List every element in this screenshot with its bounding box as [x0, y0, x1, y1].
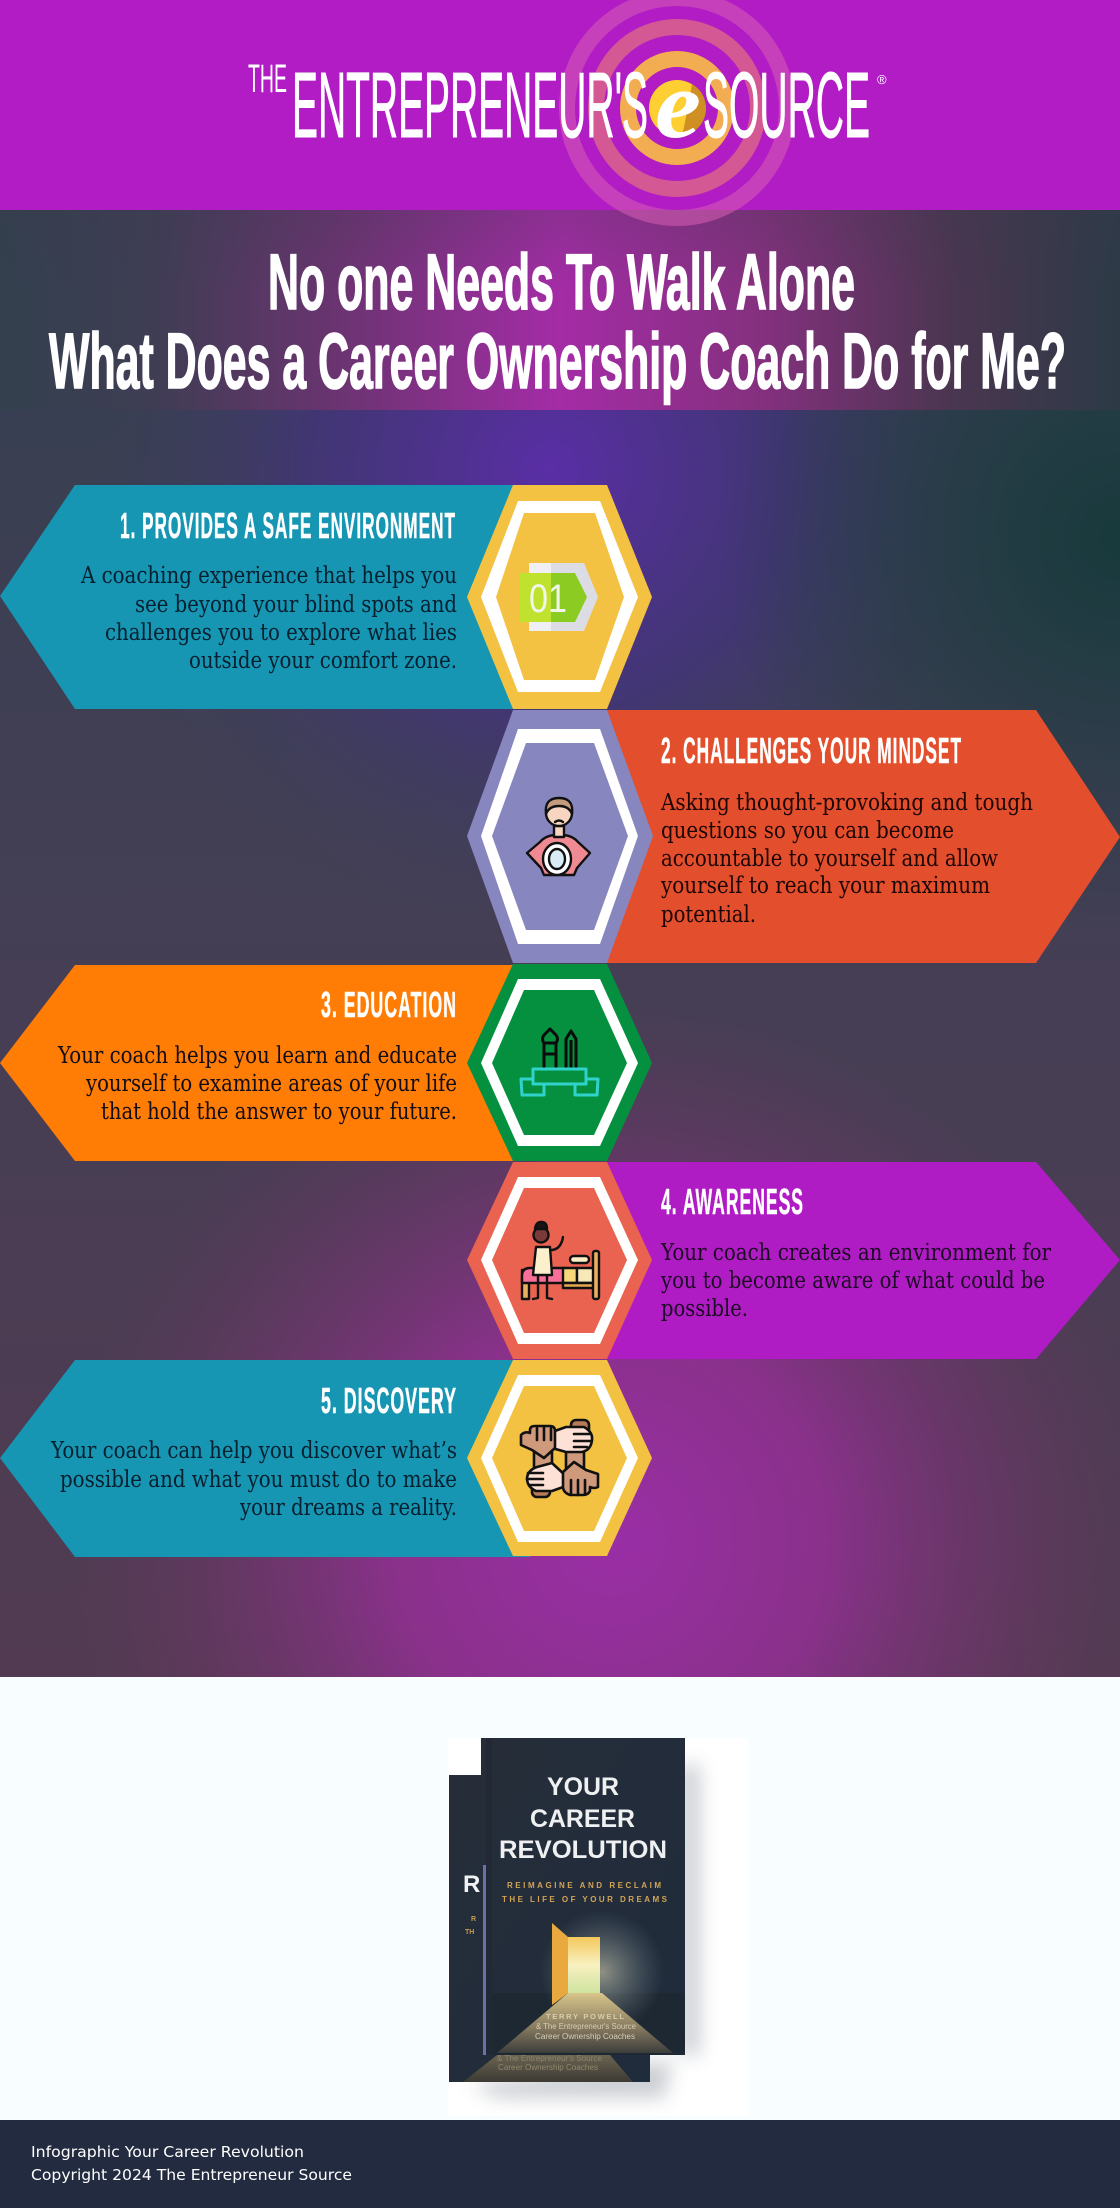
footer text: [31, 2143, 352, 2184]
body text 2: Asking thought-provoking and tough: [660, 790, 1033, 816]
body text 3: [57, 1043, 457, 1125]
body text 5: Your coach can help you discover what’s: [50, 1438, 457, 1464]
front book: YOUR: [547, 1773, 619, 1801]
front book: Career Ownership Coaches: [535, 2032, 635, 2041]
icon: 01 badge: [520, 563, 598, 631]
icon: person holding plate: [527, 798, 590, 875]
icon: brushes and banner: [521, 1029, 598, 1095]
hexagon 4: [467, 1162, 652, 1359]
front book: REVOLUTION: [499, 1836, 667, 1864]
back book: R: [471, 1916, 476, 1923]
body text 2: questions so you can become: [661, 818, 954, 844]
book image: [449, 1738, 700, 2098]
hexagon 5: [467, 1360, 652, 1556]
icon: 01 badge: 01: [529, 577, 567, 621]
panel: 4. awareness: [467, 1162, 1120, 1359]
back book: R: [463, 1871, 480, 1898]
front book: & The Entrepreneur's Source: [536, 2022, 637, 2031]
body text 1: see beyond your blind spots and: [135, 592, 457, 618]
body text 2: potential.: [661, 902, 756, 928]
logo wordmark: ®: [877, 72, 887, 87]
footer text: Copyright 2024 The Entrepreneur Source: [31, 2166, 352, 2184]
body text 2: yourself to reach your maximum: [660, 873, 990, 899]
panel: 3. education: 3. EDUCATION: [321, 984, 457, 1025]
text: SOURCE: [703, 53, 870, 157]
body text 4: [660, 1240, 1051, 1322]
body text 5: possible and what you must do to make: [60, 1467, 457, 1493]
footer text: Infographic Your Career Revolution: [31, 2143, 304, 2161]
logo wordmark: THE: [248, 57, 287, 101]
body text 3: that hold the answer to your future.: [101, 1099, 457, 1125]
body text 4: possible.: [661, 1296, 748, 1322]
body text 5: [50, 1438, 457, 1521]
front book: TERRY POWELL: [546, 2012, 624, 2021]
hexagon 2: [467, 710, 653, 963]
front book: CAREER: [530, 1805, 635, 1833]
header band: [0, 0, 1120, 210]
body text 3: Your coach helps you learn and educate: [57, 1043, 457, 1069]
body text 4: Your coach creates an environment for: [660, 1240, 1051, 1266]
panel: 1. provides a safe environment: 1. PROVIDES A SAFE ENVIRONMENT: [120, 505, 456, 546]
front book: REIMAGINE AND RECLAIM: [507, 1881, 661, 1890]
icon: person making bed: [522, 1222, 599, 1299]
footer: [0, 2120, 1120, 2208]
body text 1: outside your comfort zone.: [189, 648, 457, 674]
panel: 2. challenges your mindset: [467, 710, 1120, 963]
body text 2: [660, 790, 1033, 928]
front book: [481, 1738, 685, 2055]
logo wordmark: e: [655, 51, 701, 158]
back book: [449, 1775, 650, 2082]
panel: 4. awareness: 4. AWARENESS: [661, 1181, 804, 1222]
back book: Career Ownership Coaches: [498, 2063, 598, 2072]
logo: The Entrepreneur's Source: [248, 0, 887, 218]
white book section: [0, 1677, 1120, 2120]
back book: TH: [465, 1929, 474, 1936]
logo wordmark: ENTREPRENEUR'S: [292, 53, 648, 157]
panel: 5. discovery: [0, 1360, 652, 1557]
hexagon 3: [467, 964, 652, 1161]
background: gradient panel: [0, 210, 1120, 1677]
panel: 1. provides a safe environment: [0, 485, 652, 709]
logo target circles: [567, 0, 787, 218]
body text 3: yourself to examine areas of your life: [85, 1071, 457, 1097]
logo wordmark: [248, 51, 887, 158]
body text 4: you to become aware of what could be: [660, 1268, 1045, 1294]
title: [49, 237, 1066, 405]
body text 1: [80, 563, 457, 674]
back book: & The Entrepreneur's Source: [497, 2054, 603, 2063]
panel: 3. education: [0, 964, 652, 1161]
body text 5: your dreams a reality.: [239, 1495, 457, 1521]
body text 1: challenges you to explore what lies: [105, 620, 457, 646]
body text 1: A coaching experience that helps you: [80, 563, 457, 589]
panel: 5. discovery: 5. DISCOVERY: [321, 1380, 457, 1421]
hexagon 1: [467, 485, 652, 709]
front book: THE LIFE OF YOUR DREAMS: [502, 1895, 668, 1904]
book shadows: [470, 1765, 700, 2098]
icon: four joined hands: [521, 1420, 598, 1497]
body text 2: accountable to yourself and allow: [661, 846, 998, 872]
